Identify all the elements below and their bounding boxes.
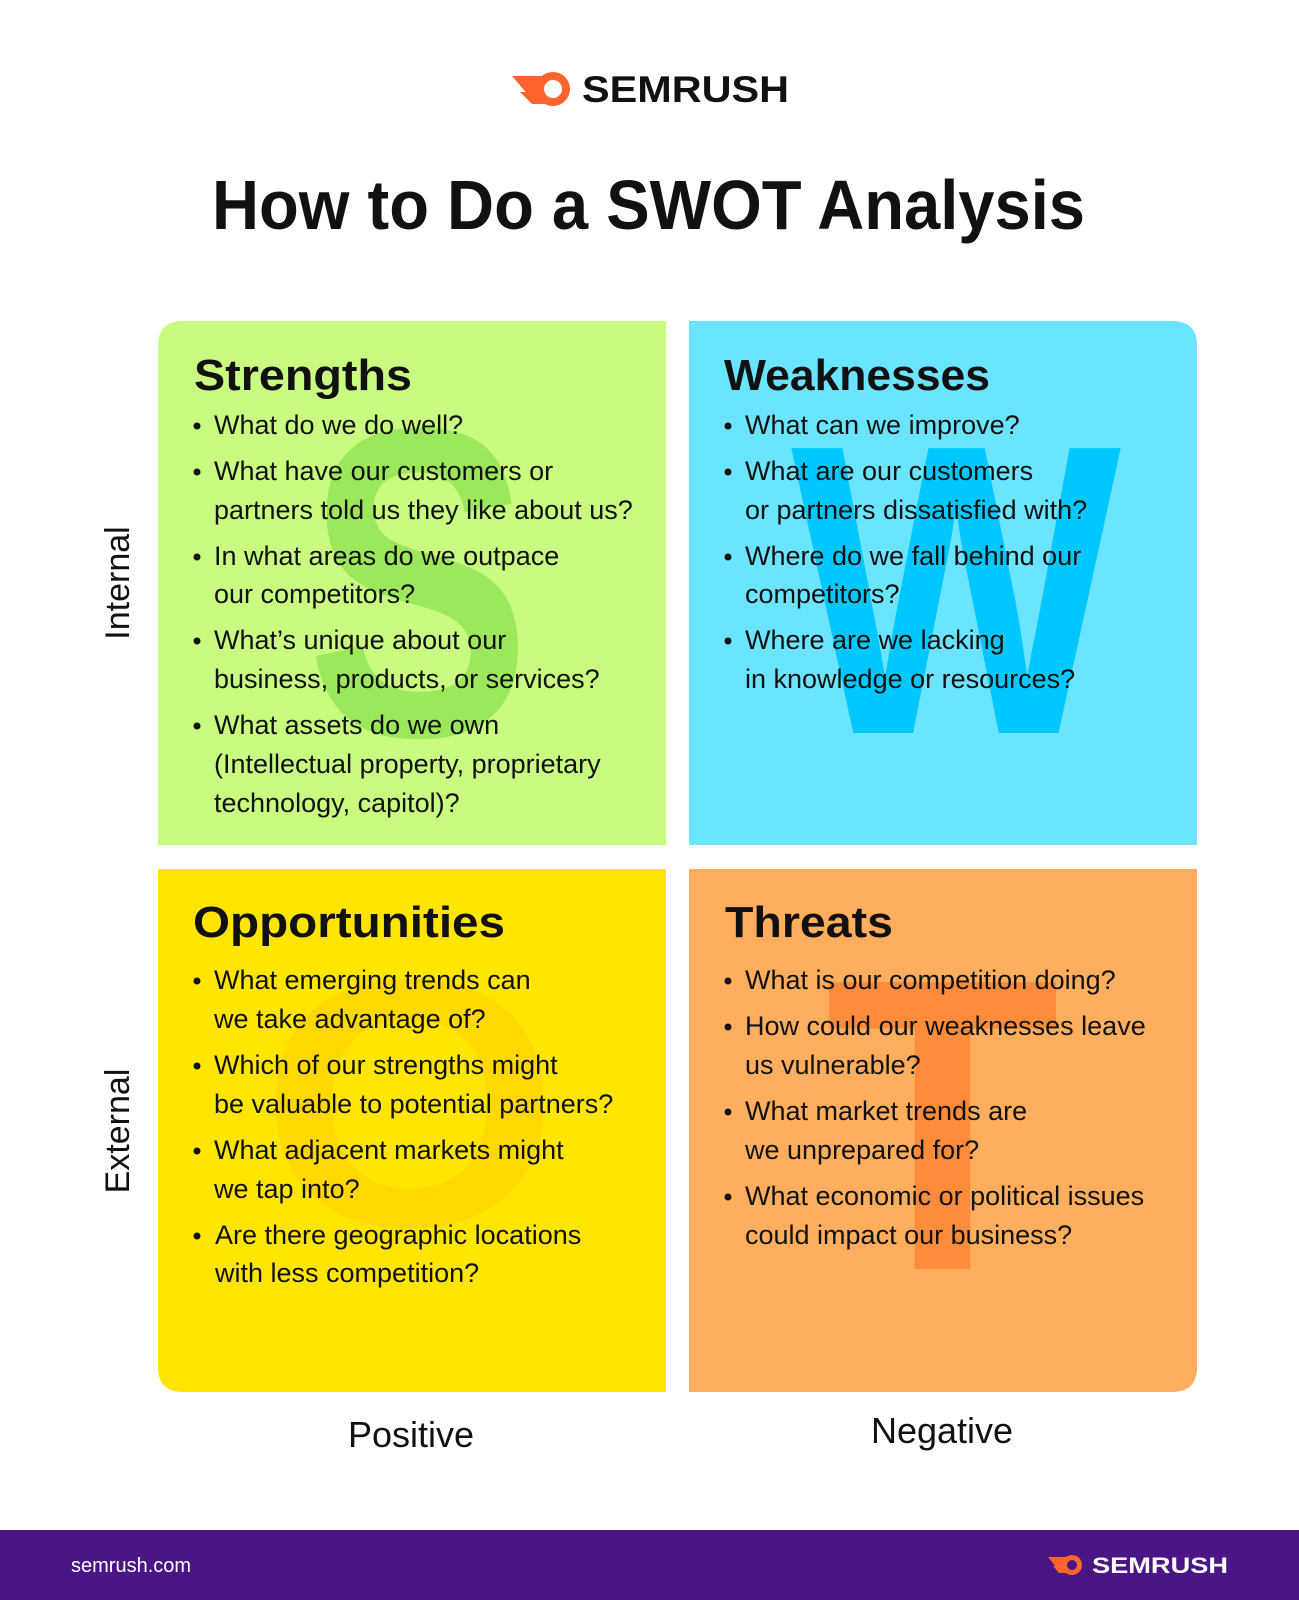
bullets: opportunities: we take advantage of?: [213, 1004, 486, 1034]
bullets: strengths: What’s unique about our: [214, 625, 506, 655]
bullets: threats: How could our weaknesses leave: [745, 1011, 1146, 1041]
heading: strengths: Strengths: [194, 351, 412, 400]
bullets: weaknesses: Where are we lacking: [745, 625, 1005, 655]
bullets: opportunities: be valuable to potential partners?: [214, 1089, 613, 1119]
big letter T: T: [825, 893, 1060, 1358]
bullets: threats: What economic or political issues: [745, 1181, 1144, 1211]
bullets: weaknesses: in knowledge or resources?: [745, 664, 1075, 694]
bullets: threats: What market trends are: [745, 1096, 1027, 1126]
panel: opportunities: [158, 869, 666, 1392]
bullets: weaknesses: What can we improve?: [745, 410, 1020, 440]
big letter O: O: [260, 906, 560, 1300]
bullets: opportunities: What emerging trends can: [214, 965, 531, 995]
logo: top: [512, 69, 789, 110]
logo text: SEMRUSH: [582, 69, 789, 110]
bullets: strengths: What do we do well?: [214, 410, 463, 440]
panel: strengths: [158, 321, 666, 845]
title: How to Do a SWOT Analysis: [212, 166, 1085, 244]
bullets: opportunities: What adjacent markets might: [214, 1135, 564, 1165]
heading: threats: Threats: [725, 898, 893, 947]
footer logo: SEMRUSH: [1092, 1553, 1228, 1578]
bullets: weaknesses: or partners dissatisfied with?: [745, 495, 1087, 525]
icon: semrush flame: [512, 72, 570, 106]
footer: [0, 1530, 1299, 1600]
bullets: opportunities: with less competition?: [214, 1258, 479, 1288]
bullets: strengths: (Intellectual property, proprietary: [214, 749, 601, 779]
heading: opportunities: Opportunities: [193, 898, 505, 947]
bullets: opportunities: we tap into?: [213, 1174, 360, 1204]
bullets: opportunities: Are there geographic locations: [215, 1220, 581, 1250]
heading: weaknesses: Weaknesses: [724, 351, 990, 400]
bullets: strengths: What have our customers or: [214, 456, 553, 486]
bullets: strengths: [194, 410, 633, 818]
bullets: threats: What is our competition doing?: [745, 965, 1116, 995]
bullets: strengths: What assets do we own: [214, 710, 499, 740]
bullets: threats: could impact our business?: [745, 1220, 1072, 1250]
bullets: strengths: partners told us they like about us?: [214, 495, 633, 525]
bullets: weaknesses: [724, 410, 1087, 694]
bullets: strengths: business, products, or services?: [214, 664, 600, 694]
bullets: opportunities: [194, 965, 613, 1288]
bullets: weaknesses: What are our customers: [745, 456, 1033, 486]
footer logo: [1048, 1553, 1228, 1578]
bullets: threats: we unprepared for?: [744, 1135, 979, 1165]
bullets: strengths: our competitors?: [214, 579, 415, 609]
bullets: strengths: technology, capitol)?: [214, 788, 460, 818]
big letter S: S: [306, 338, 531, 829]
axis label: internal: Internal: [99, 526, 137, 640]
axis label: positive: Positive: [348, 1414, 474, 1455]
axis label: negative: Negative: [871, 1410, 1013, 1451]
bullets: strengths: In what areas do we outpace: [214, 541, 559, 571]
panel: weaknesses: [689, 321, 1197, 845]
panel: threats: [689, 869, 1197, 1392]
bullets: weaknesses: competitors?: [745, 579, 900, 609]
bullets: threats: [724, 965, 1146, 1250]
axis label: external: External: [99, 1069, 137, 1193]
footer url: semrush.com: [71, 1555, 191, 1577]
bullets: opportunities: Which of our strengths might: [214, 1050, 558, 1080]
bullets: threats: us vulnerable?: [745, 1050, 921, 1080]
big letter W: W: [791, 358, 1124, 821]
bullets: weaknesses: Where do we fall behind our: [745, 541, 1081, 571]
